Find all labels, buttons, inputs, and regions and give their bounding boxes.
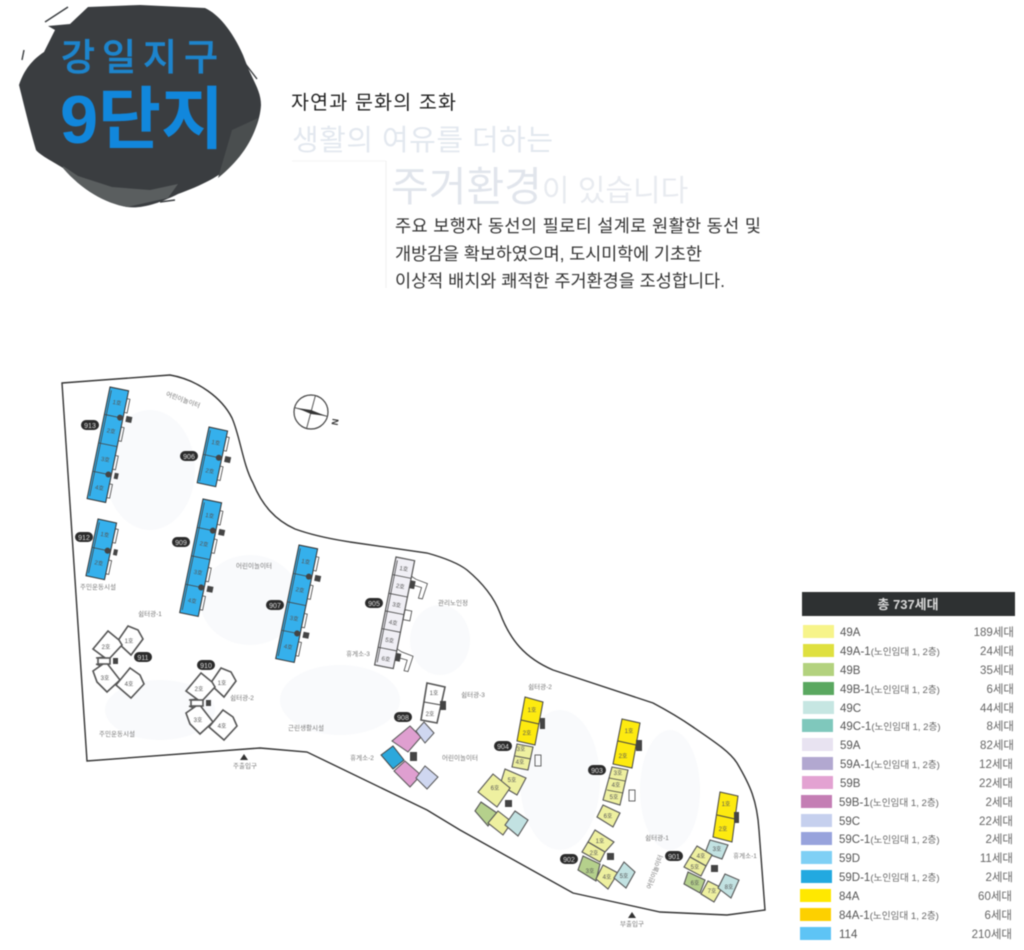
legend row 84A [800, 889, 1012, 903]
legend row 59B-1: 59B-1(노인임대 1, 2층) [839, 797, 939, 809]
legend row 84A-1 [800, 908, 1012, 922]
legend row 59D: 11세대 [980, 852, 1013, 865]
legend row 59C-1: 2세대 [985, 833, 1013, 846]
legend row 59C: 22세대 [979, 815, 1013, 828]
faint heading line 2: 생활의 여유를 더하는 [292, 124, 553, 157]
building number pills: 904 [497, 744, 509, 751]
legend row 59B [802, 776, 1013, 790]
facility labels: 근린생활시설 [288, 723, 324, 732]
building 904: 3호 [517, 746, 526, 753]
building 905: 4호 [388, 619, 399, 628]
building 913: 3호 [100, 456, 111, 464]
building 902: 2호 [590, 850, 599, 857]
legend row 49C-1: 49C-1(노인임대 1, 2층) [840, 721, 941, 733]
legend row 49A: 189세대 [974, 626, 1014, 639]
body copy [395, 216, 761, 291]
heading line 1: 자연과 문화의 조화 [291, 92, 456, 114]
legend row 59B: 59B [840, 778, 861, 790]
legend row 49B-1: 6세대 [986, 683, 1014, 696]
building 907: 3호 [289, 615, 300, 623]
building number pills: 905 [368, 601, 380, 608]
building 901: 3호 [713, 846, 722, 853]
facility labels: 어린이놀이터 [442, 753, 478, 762]
legend row 59D: 59D [839, 853, 860, 865]
legend row 59D-1: 2세대 [985, 871, 1013, 884]
facility labels: 쉼터광-1 [138, 609, 162, 618]
building 903: 2호 [619, 753, 628, 760]
building 909 [180, 499, 230, 618]
building 906: 2호 [205, 467, 215, 476]
facility labels: 휴게소-1 [733, 851, 757, 860]
building 902 [578, 830, 635, 889]
legend row 59B-1 [801, 795, 1013, 809]
legend row 59B-1: 2세대 [985, 796, 1013, 809]
building 902: 3호 [586, 868, 595, 875]
building 907 [276, 545, 326, 664]
legend row 49B [803, 663, 1014, 677]
building 911: 4호 [125, 681, 134, 688]
building 903: 3호 [614, 770, 623, 777]
legend row 49C-1 [802, 719, 1014, 733]
facility labels: 주민운동시설 [80, 582, 116, 591]
building 901: 8호 [725, 884, 734, 891]
building 903: 5호 [610, 794, 619, 801]
building number pills: 908 [397, 715, 409, 722]
legend row 59C: 59C [839, 816, 860, 828]
legend row 49B-1: 49B-1(노인임대 1, 2층) [840, 684, 940, 696]
legend row 49B: 35세대 [980, 664, 1014, 677]
legend row 49C [803, 701, 1014, 715]
building 901: 1호 [722, 801, 731, 808]
entrance: secondary: 부출입구 [620, 919, 644, 928]
facility labels: 쉼터광-2 [528, 682, 552, 691]
facility labels: 관리노인정 [438, 598, 468, 607]
building 911: 3호 [101, 675, 110, 682]
legend header: 총 737세대 [877, 597, 939, 612]
building 909: 1호 [205, 512, 215, 521]
facility labels: 어린이놀이터 [236, 561, 272, 570]
legend row 114: 114 [839, 929, 858, 941]
building number pills: 901 [668, 854, 680, 861]
building number pills: 903 [591, 768, 603, 775]
building 913: 4호 [94, 484, 105, 493]
legend row 59A-1: 12세대 [979, 758, 1013, 771]
heading text block [291, 92, 761, 291]
building number pills: 907 [269, 603, 281, 610]
legend row 59B: 22세대 [979, 777, 1013, 790]
building 913 [87, 387, 137, 504]
building 905: 2호 [395, 583, 406, 591]
facility labels: 쉼터광-2 [230, 693, 254, 702]
building 908: 1호 [430, 690, 439, 697]
building 907: 1호 [301, 558, 311, 567]
legend row 49B-1 [803, 682, 1014, 696]
legend row 59C-1: 59C-1(노인임대 1, 2층) [839, 834, 940, 846]
legend row 84A-1: 84A-1(노인임대 1, 2층) [839, 910, 939, 922]
building 907: 2호 [295, 586, 305, 595]
legend row 59A: 82세대 [980, 739, 1014, 752]
faint heading line 3: 주거환경이 있습니다 [391, 164, 688, 210]
building 906: 1호 [211, 439, 221, 448]
legend row 49C: 49C [840, 703, 861, 715]
legend row 59C [801, 814, 1013, 828]
building 903: 6호 [604, 813, 613, 820]
building 905 [375, 557, 431, 672]
building 902: 5호 [620, 873, 629, 880]
building 901: 4호 [697, 853, 706, 860]
legend row 59D-1: 59D-1(노인임대 1, 2층) [839, 872, 940, 884]
faint landscape [105, 410, 700, 850]
building 910 [186, 668, 237, 740]
building 910: 4호 [218, 723, 227, 730]
site plan map [62, 375, 765, 928]
legend row 59A: 59A [840, 740, 861, 752]
building number pills: 911 [137, 655, 149, 662]
legend row 59A-1: 59A-1(노인임대 1, 2층) [840, 759, 940, 771]
facility labels [80, 389, 757, 890]
entrance: main: 주출입구 [233, 761, 257, 770]
legend row 49A-1: 24세대 [980, 645, 1014, 658]
building 905: 6호 [381, 655, 391, 664]
entrance: main [233, 754, 257, 770]
building 913: 2호 [106, 427, 117, 436]
building 901: 2호 [719, 826, 728, 833]
building 904 [475, 697, 545, 836]
legend row 49A-1: 49A-1(노인임대 1, 2층) [840, 646, 940, 658]
legend row 49A: 49A [840, 627, 861, 639]
facility labels: 쉼터광-3 [461, 690, 485, 699]
building number pills: 913 [84, 423, 96, 430]
legend panel [800, 592, 1015, 941]
building number pills [75, 420, 683, 864]
building 901: 7호 [708, 888, 717, 895]
legend row 49C: 44세대 [980, 702, 1014, 715]
facility labels: 어린이놀이터 [165, 389, 202, 410]
legend row 59C-1 [801, 832, 1013, 846]
building 901 [684, 792, 739, 902]
legend row 49B: 49B [840, 665, 861, 677]
building 909: 2호 [199, 540, 209, 549]
building 904: 5호 [508, 777, 517, 784]
legend row 49A [803, 625, 1014, 639]
building 904: 4호 [516, 759, 525, 766]
building 902: 1호 [596, 838, 605, 845]
building 903: 1호 [625, 728, 634, 735]
facility labels: 휴게소-2 [350, 753, 374, 762]
building 903: 4호 [612, 782, 621, 789]
building 909: 4호 [187, 597, 198, 606]
building 909: 3호 [193, 569, 204, 577]
body copy: 주요 보행자 동선의 필로티 설계로 원활한 동선 및 [395, 216, 761, 236]
legend row 59D [801, 851, 1013, 865]
building number pills: 912 [78, 535, 90, 542]
building 910: 2호 [195, 686, 204, 693]
building 903 [597, 719, 642, 827]
legend row 114: 210세대 [972, 928, 1012, 941]
body copy: 이상적 배치와 쾌적한 주거환경을 조성합니다. [395, 271, 725, 291]
building 906 [197, 427, 236, 489]
building 911: 2호 [102, 644, 111, 651]
entrance: secondary [620, 912, 644, 928]
facility labels: 쉼터광-1 [645, 833, 669, 842]
building number pills: 906 [183, 454, 195, 461]
building 905: 5호 [385, 637, 395, 645]
building 913: 1호 [112, 399, 122, 408]
compass [294, 395, 340, 429]
building number pills: 909 [175, 540, 187, 547]
title: complex number: 9단지 [60, 82, 224, 158]
legend row 114 [800, 927, 1012, 941]
building 908: 2호 [426, 711, 435, 718]
building 904: 6호 [491, 785, 500, 792]
building 901: 5호 [691, 864, 700, 871]
facility labels: 휴게소-3 [346, 649, 370, 658]
legend row 49C-1: 8세대 [986, 720, 1014, 733]
legend row 49A-1 [803, 644, 1014, 658]
building 905: 3호 [392, 601, 402, 610]
building 910: 1호 [218, 680, 227, 687]
building 912 [86, 519, 123, 581]
legend row 84A-1: 6세대 [984, 909, 1012, 922]
legend row 59A [802, 738, 1014, 752]
body copy: 개방감을 확보하였으며, 도시미학에 기초한 [395, 244, 702, 264]
building 912: 1호 [100, 531, 110, 540]
title: district name: 강일지구 [61, 37, 218, 78]
building 911: 1호 [125, 638, 134, 645]
building 904: 2호 [523, 730, 532, 737]
legend row 84A: 84A [839, 891, 860, 903]
building 911 [93, 626, 144, 698]
building 912: 2호 [94, 559, 104, 568]
building 901: 6호 [691, 880, 700, 887]
compass: N [330, 418, 340, 426]
legend row 59D-1 [801, 870, 1013, 884]
building 902: 4호 [603, 874, 612, 881]
building 905: 1호 [399, 565, 409, 574]
legend header [802, 592, 1015, 616]
legend row 59A-1 [802, 757, 1013, 771]
building 908 [381, 683, 446, 789]
facility labels: 어린이놀이터 [644, 853, 665, 890]
building 904: 1호 [528, 707, 537, 714]
building number pills: 902 [563, 857, 575, 864]
legend row 84A: 60세대 [978, 890, 1012, 903]
building number pills: 910 [200, 663, 212, 670]
facility labels: 주민운동시설 [99, 729, 135, 738]
ink blob title badge [19, 5, 261, 207]
building 907: 4호 [283, 643, 294, 652]
building 910: 3호 [194, 717, 203, 724]
site boundary [62, 375, 765, 915]
